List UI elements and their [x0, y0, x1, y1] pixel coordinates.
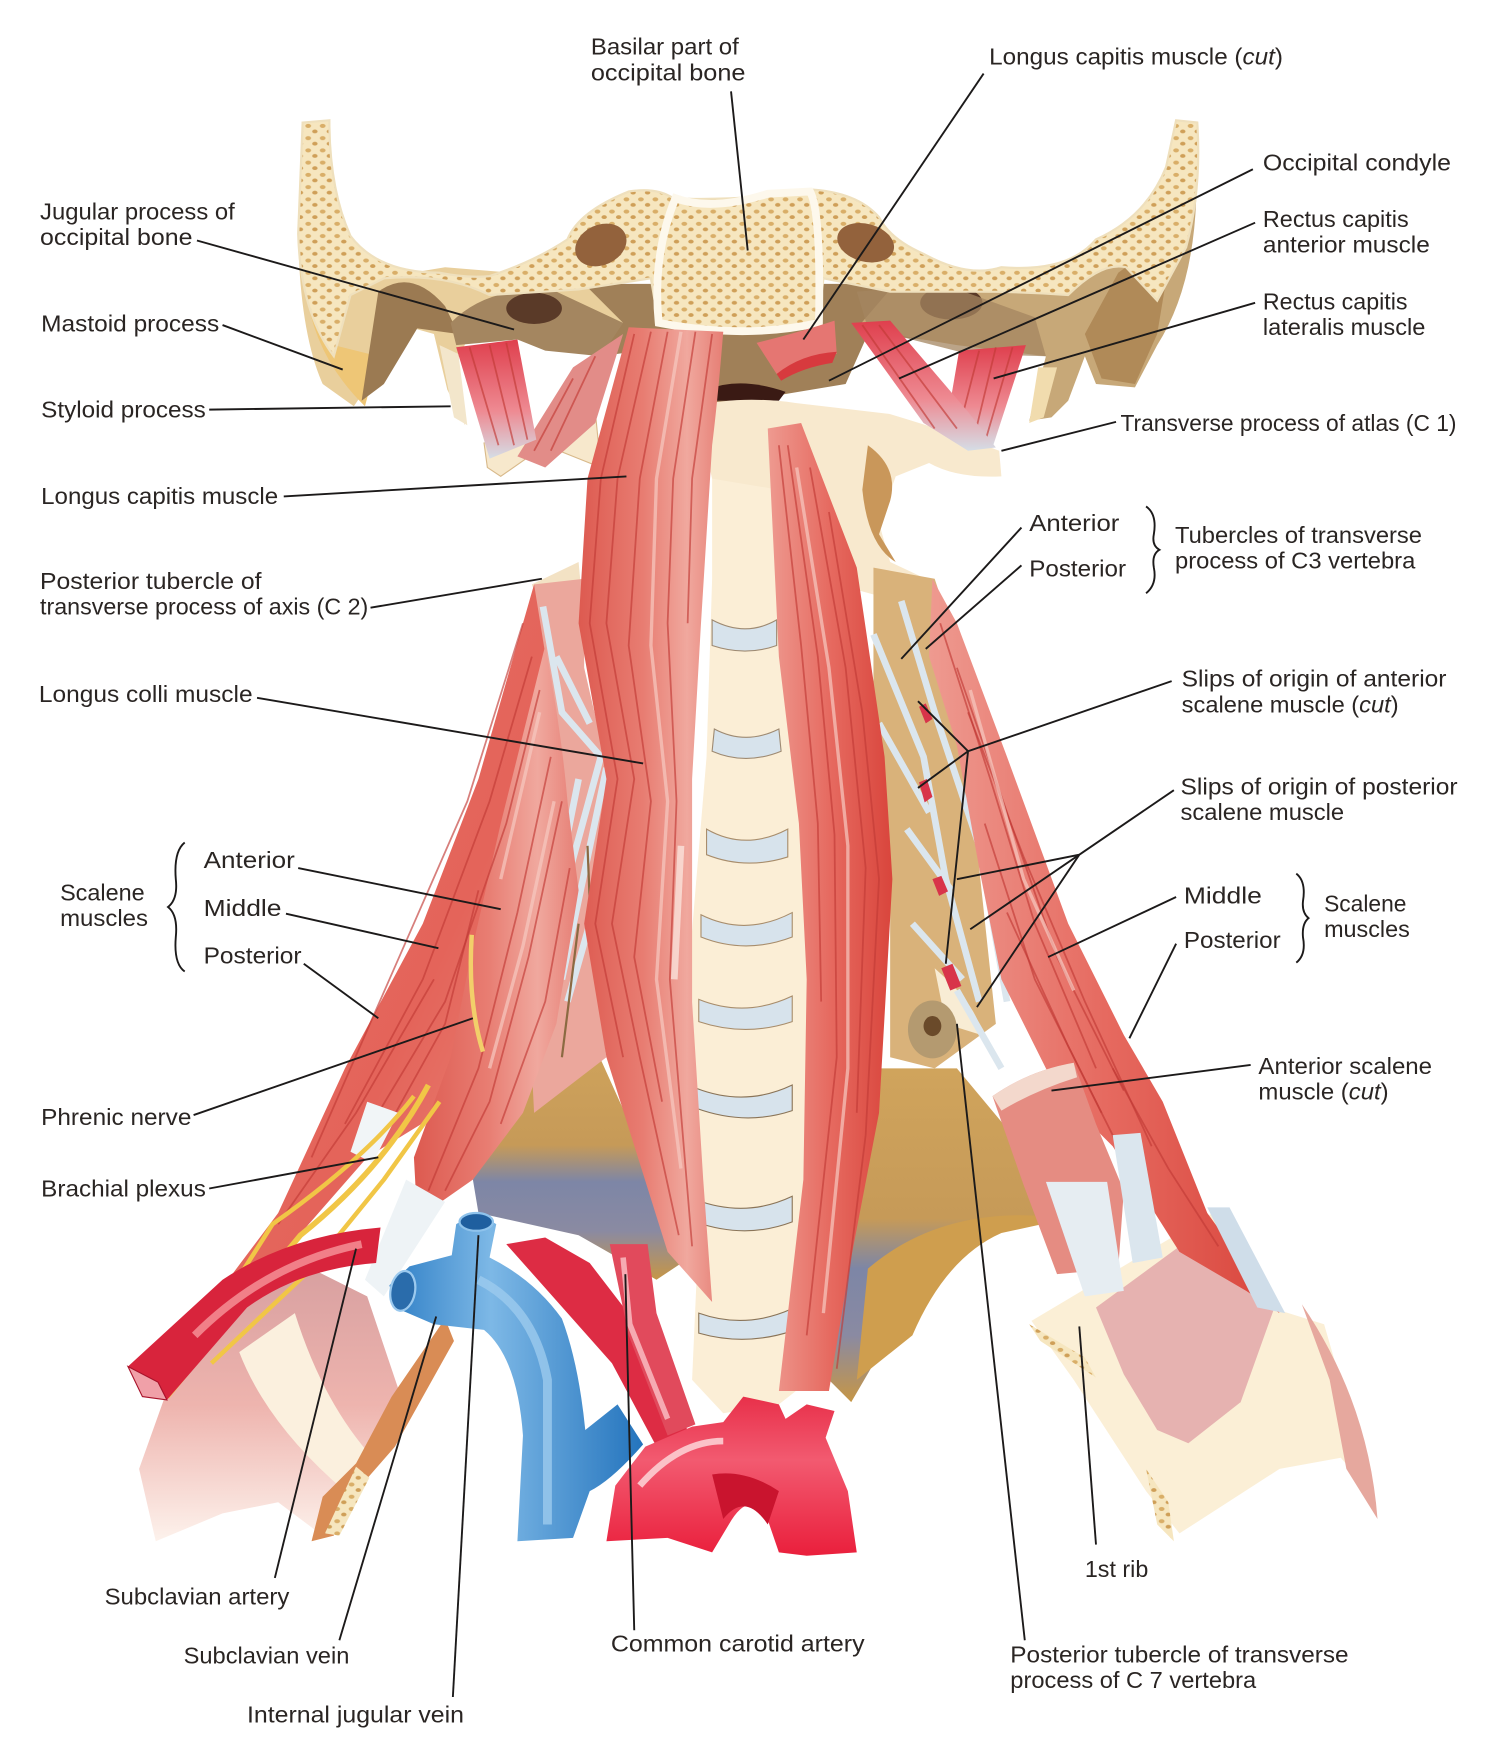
slips of anterior scalene (cut) — [919, 703, 961, 990]
label: Rectus capitis anterior muscle — [899, 206, 1430, 378]
label: Scalene muscles left (Anterior, Middle, Posterior) — [60, 842, 501, 1018]
label: Common carotid artery: Common carotid artery — [611, 1630, 865, 1656]
label: Phrenic nerve — [41, 1018, 473, 1130]
backing between scalene and longus — [523, 579, 610, 1113]
label: Phrenic nerve: Phrenic nerve — [41, 1104, 191, 1130]
left mastoid tip — [306, 289, 378, 406]
styloid left — [440, 345, 467, 425]
subclavian artery — [128, 1227, 381, 1400]
tendon of posterior scalene — [1207, 1207, 1285, 1313]
right scalene muscles — [929, 579, 1285, 1313]
label: Posterior tubercle of transverse process of axis — [40, 568, 542, 619]
right brown base — [857, 285, 1046, 356]
label: Slips of origin of anterior scalene muscle — [918, 666, 1447, 964]
right longus capitis and longus colli — [768, 423, 892, 1391]
right ribs and vertebral ledge — [818, 1068, 1068, 1402]
muscle body — [768, 423, 892, 1391]
left longus capitis and longus colli — [517, 327, 723, 1302]
label: Longus colli muscle: Longus colli muscle — [39, 681, 253, 707]
label: Scalene muscles left (Anterior, Middle, Posterior): Anterior — [204, 847, 295, 873]
label: Anterior scalene muscle (cut): muscle (cut) — [1258, 1078, 1389, 1104]
right temporal and mastoid — [857, 200, 1196, 421]
label: Styloid process — [41, 396, 451, 422]
pink intercostal — [139, 1269, 403, 1541]
label: Posterior tubercle of transverse process of C7 vertebra: process of C 7 vertebra — [1010, 1667, 1256, 1693]
left mastoid and temporal bone — [298, 239, 623, 425]
label: Rectus capitis lateralis muscle — [994, 288, 1425, 378]
label: Scalene muscles right (Middle, Posterior): Scalene — [1324, 890, 1406, 916]
label: Slips of origin of anterior scalene muscle: Slips of origin of anterior — [1182, 666, 1447, 692]
lateral fibres — [278, 623, 570, 1224]
label: Tubercles of transverse process of C3 vertebra: Posterior — [1029, 556, 1126, 582]
label: Anterior scalene muscle (cut): Anterior scalene — [1258, 1053, 1432, 1079]
foramen magnum dark slit — [708, 383, 786, 401]
label: Rectus capitis lateralis muscle: lateralis muscle — [1263, 314, 1425, 340]
label: Longus capitis muscle: Longus capitis muscle — [41, 483, 278, 509]
label: Occipital condyle: Occipital condyle — [1263, 149, 1451, 175]
right brown fossa — [1085, 260, 1168, 384]
pink lower panel — [1096, 1224, 1274, 1443]
label: Longus capitis muscle (cut): Longus capitis muscle ( cut) — [989, 44, 1283, 70]
common carotid artery — [610, 1244, 695, 1436]
basilar part of occipital bone — [657, 192, 819, 331]
cervical and thoracic vertebral column — [690, 411, 812, 1413]
label: Basilar part of occipital bone — [591, 34, 748, 251]
label: Scalene muscles left (Anterior, Middle, Posterior): Scalene — [60, 879, 145, 905]
shading on right articular pillar — [862, 445, 896, 562]
right carotid canal — [833, 217, 899, 268]
fibres — [779, 445, 879, 1369]
rib pale band — [239, 1313, 373, 1491]
brown underside filling — [556, 284, 979, 403]
muscle body — [579, 327, 723, 1302]
label: Slips of origin of posterior scalene muscle — [957, 774, 1458, 1007]
left inner tendons column — [523, 579, 610, 1113]
left brown fossa — [362, 282, 458, 401]
label: 1st rib — [1079, 1326, 1148, 1582]
rectus capitis lateralis left — [456, 340, 536, 459]
left jugular foramen — [506, 293, 562, 324]
label: Internal jugular vein: Internal jugular vein — [247, 1702, 464, 1728]
rib spongy cut — [325, 1467, 369, 1536]
anterior scalene — [414, 646, 579, 1219]
left ribs — [473, 1035, 690, 1280]
label: Slips of origin of posterior scalene muscle: scalene muscle — [1181, 799, 1344, 825]
vertebral bodies — [690, 411, 812, 1413]
left jugular region — [451, 290, 623, 356]
tendon of anterior scalene — [1046, 1182, 1124, 1296]
discs — [712, 620, 777, 651]
aortic arch — [606, 1397, 857, 1556]
vessel openings — [460, 1213, 493, 1231]
label: Common carotid artery — [611, 1274, 865, 1656]
left scalene muscles — [228, 584, 579, 1296]
right tubercles column with tendinous slips — [873, 568, 1007, 1068]
label: Longus capitis muscle — [41, 476, 626, 509]
label: Basilar part of occipital bone: occipital bone — [591, 59, 746, 85]
atlas and axis bones — [484, 400, 1001, 623]
brachiocephalic and subclavian stem — [506, 1237, 690, 1447]
cream process edges — [935, 968, 981, 1035]
label: Transverse process of atlas — [1001, 410, 1457, 451]
label: Posterior tubercle of transverse process of C7 vertebra — [957, 1024, 1349, 1693]
label: Tubercles of transverse process of C3 vertebra: Anterior — [1029, 510, 1120, 536]
left carotid canal — [568, 216, 634, 274]
label: Brachial plexus: Brachial plexus — [41, 1175, 206, 1201]
label: Scalene muscles left (Anterior, Middle, Posterior): Middle — [204, 895, 282, 921]
tan rib band right — [857, 1215, 1068, 1380]
rectus capitis anterior right — [851, 321, 996, 451]
thoracic inlet vertebrae and ribs behind — [473, 1035, 1068, 1402]
spongy cut edge — [1029, 1324, 1096, 1378]
left first rib and chest wall — [139, 1269, 454, 1541]
posterior and middle scalene — [228, 584, 547, 1280]
label: Scalene muscles left (Anterior, Middle, Posterior): Posterior — [204, 943, 302, 969]
branches of aortic arch — [506, 1237, 695, 1447]
outer pink muscle — [1302, 1304, 1378, 1519]
label: Posterior tubercle of transverse process of axis: transverse process of axis (C 2) — [40, 593, 368, 619]
label: Scalene muscles right (Middle, Posterior): Posterior — [1184, 927, 1281, 953]
occipital bone cross-section — [298, 120, 1198, 356]
label: Internal jugular vein — [247, 1235, 478, 1728]
label: Mastoid process: Mastoid process — [41, 311, 219, 337]
left C2 tubercle — [532, 562, 584, 623]
label: Occipital condyle — [829, 149, 1451, 381]
label: Scalene muscles right (Middle, Posterior) — [1048, 874, 1410, 1038]
phrenic nerve — [471, 935, 483, 1052]
second cut edge — [1146, 1469, 1174, 1541]
label: Transverse process of atlas: Transverse process of atlas (C 1) — [1120, 410, 1457, 436]
label: Jugular process of occipital bone: Jugular process of — [40, 198, 235, 224]
brachial plexus — [167, 1085, 440, 1397]
label: Slips of origin of anterior scalene muscle: scalene muscle (cut) — [1182, 691, 1399, 717]
label: Scalene muscles left (Anterior, Middle, Posterior): muscles — [60, 905, 148, 931]
fibres — [940, 623, 1218, 1246]
fibres — [534, 332, 712, 1246]
white tendon streak longus colli — [674, 846, 681, 979]
brown articular column — [873, 568, 996, 1068]
label: Rectus capitis lateralis muscle: Rectus capitis — [1263, 288, 1408, 314]
label: Longus colli muscle — [39, 681, 643, 763]
subclavian vein opening — [387, 1269, 418, 1313]
styloid right — [1029, 367, 1057, 423]
right jugular foramen — [920, 286, 983, 319]
label: Scalene muscles right (Middle, Posterior): Middle — [1184, 883, 1262, 909]
rectus capitis anterior left — [517, 334, 623, 467]
label: Jugular process of occipital bone: occipital bone — [40, 224, 192, 250]
label: Posterior tubercle of transverse process of C7 vertebra: Posterior tubercle of transverse — [1010, 1642, 1349, 1668]
cream rib — [1031, 1213, 1374, 1533]
rectus capitis lateralis right — [946, 345, 1026, 447]
cut end — [993, 1063, 1077, 1111]
label: Tubercles of transverse process of C3 vertebra — [901, 506, 1422, 659]
left atlas transverse process — [484, 412, 601, 476]
label: Brachial plexus — [41, 1157, 378, 1201]
label: Subclavian artery — [105, 1249, 356, 1610]
longus capitis muscle (cut) — [757, 321, 837, 381]
cut rib edge — [312, 1319, 454, 1541]
label: Rectus capitis anterior muscle: Rectus capitis — [1263, 206, 1409, 232]
label: Subclavian vein — [184, 1316, 436, 1669]
label: Scalene muscles right (Middle, Posterior): muscles — [1324, 916, 1410, 942]
label: Anterior scalene muscle (cut) — [1051, 1053, 1432, 1104]
middle and posterior scalene — [929, 579, 1280, 1313]
right first rib and chest wall — [1029, 1213, 1378, 1541]
label: Jugular process of occipital bone — [40, 198, 514, 330]
label: 1st rib: 1st rib — [1085, 1556, 1148, 1582]
label: Posterior tubercle of transverse process of axis: Posterior tubercle of — [40, 568, 262, 594]
carotid highlight — [623, 1257, 668, 1419]
anterior scalene muscle (cut) — [993, 1063, 1124, 1274]
skull base: temporal and occipital underside — [298, 200, 1196, 425]
label: Basilar part of occipital bone: Basilar part of — [591, 34, 739, 60]
tendon of middle scalene — [350, 1102, 398, 1163]
central dens and atlas arch — [695, 400, 1001, 607]
highlight — [478, 1280, 547, 1525]
veins: internal jugular, subclavian, brachiocephalic — [387, 1213, 643, 1541]
label: Rectus capitis anterior muscle: anterior muscle — [1263, 232, 1430, 258]
C7 foramen — [924, 1016, 941, 1036]
label: Longus capitis muscle (cut) — [803, 44, 1283, 340]
label: Slips of origin of posterior scalene muscle: Slips of origin of posterior — [1181, 774, 1458, 800]
tendon of middle scalene — [1113, 1133, 1163, 1263]
tendon of anterior scalene at first rib — [365, 1180, 445, 1296]
C7 tubercle — [908, 1000, 957, 1058]
label: Styloid process: Styloid process — [41, 396, 206, 422]
label: Mastoid process — [41, 311, 343, 370]
label: Subclavian vein: Subclavian vein — [184, 1643, 349, 1669]
label: Tubercles of transverse process of C3 vertebra: process of C3 vertebra — [1175, 548, 1415, 574]
label: Subclavian artery: Subclavian artery — [105, 1584, 290, 1610]
label: Tubercles of transverse process of C3 vertebra: Tubercles of transverse — [1175, 522, 1422, 548]
